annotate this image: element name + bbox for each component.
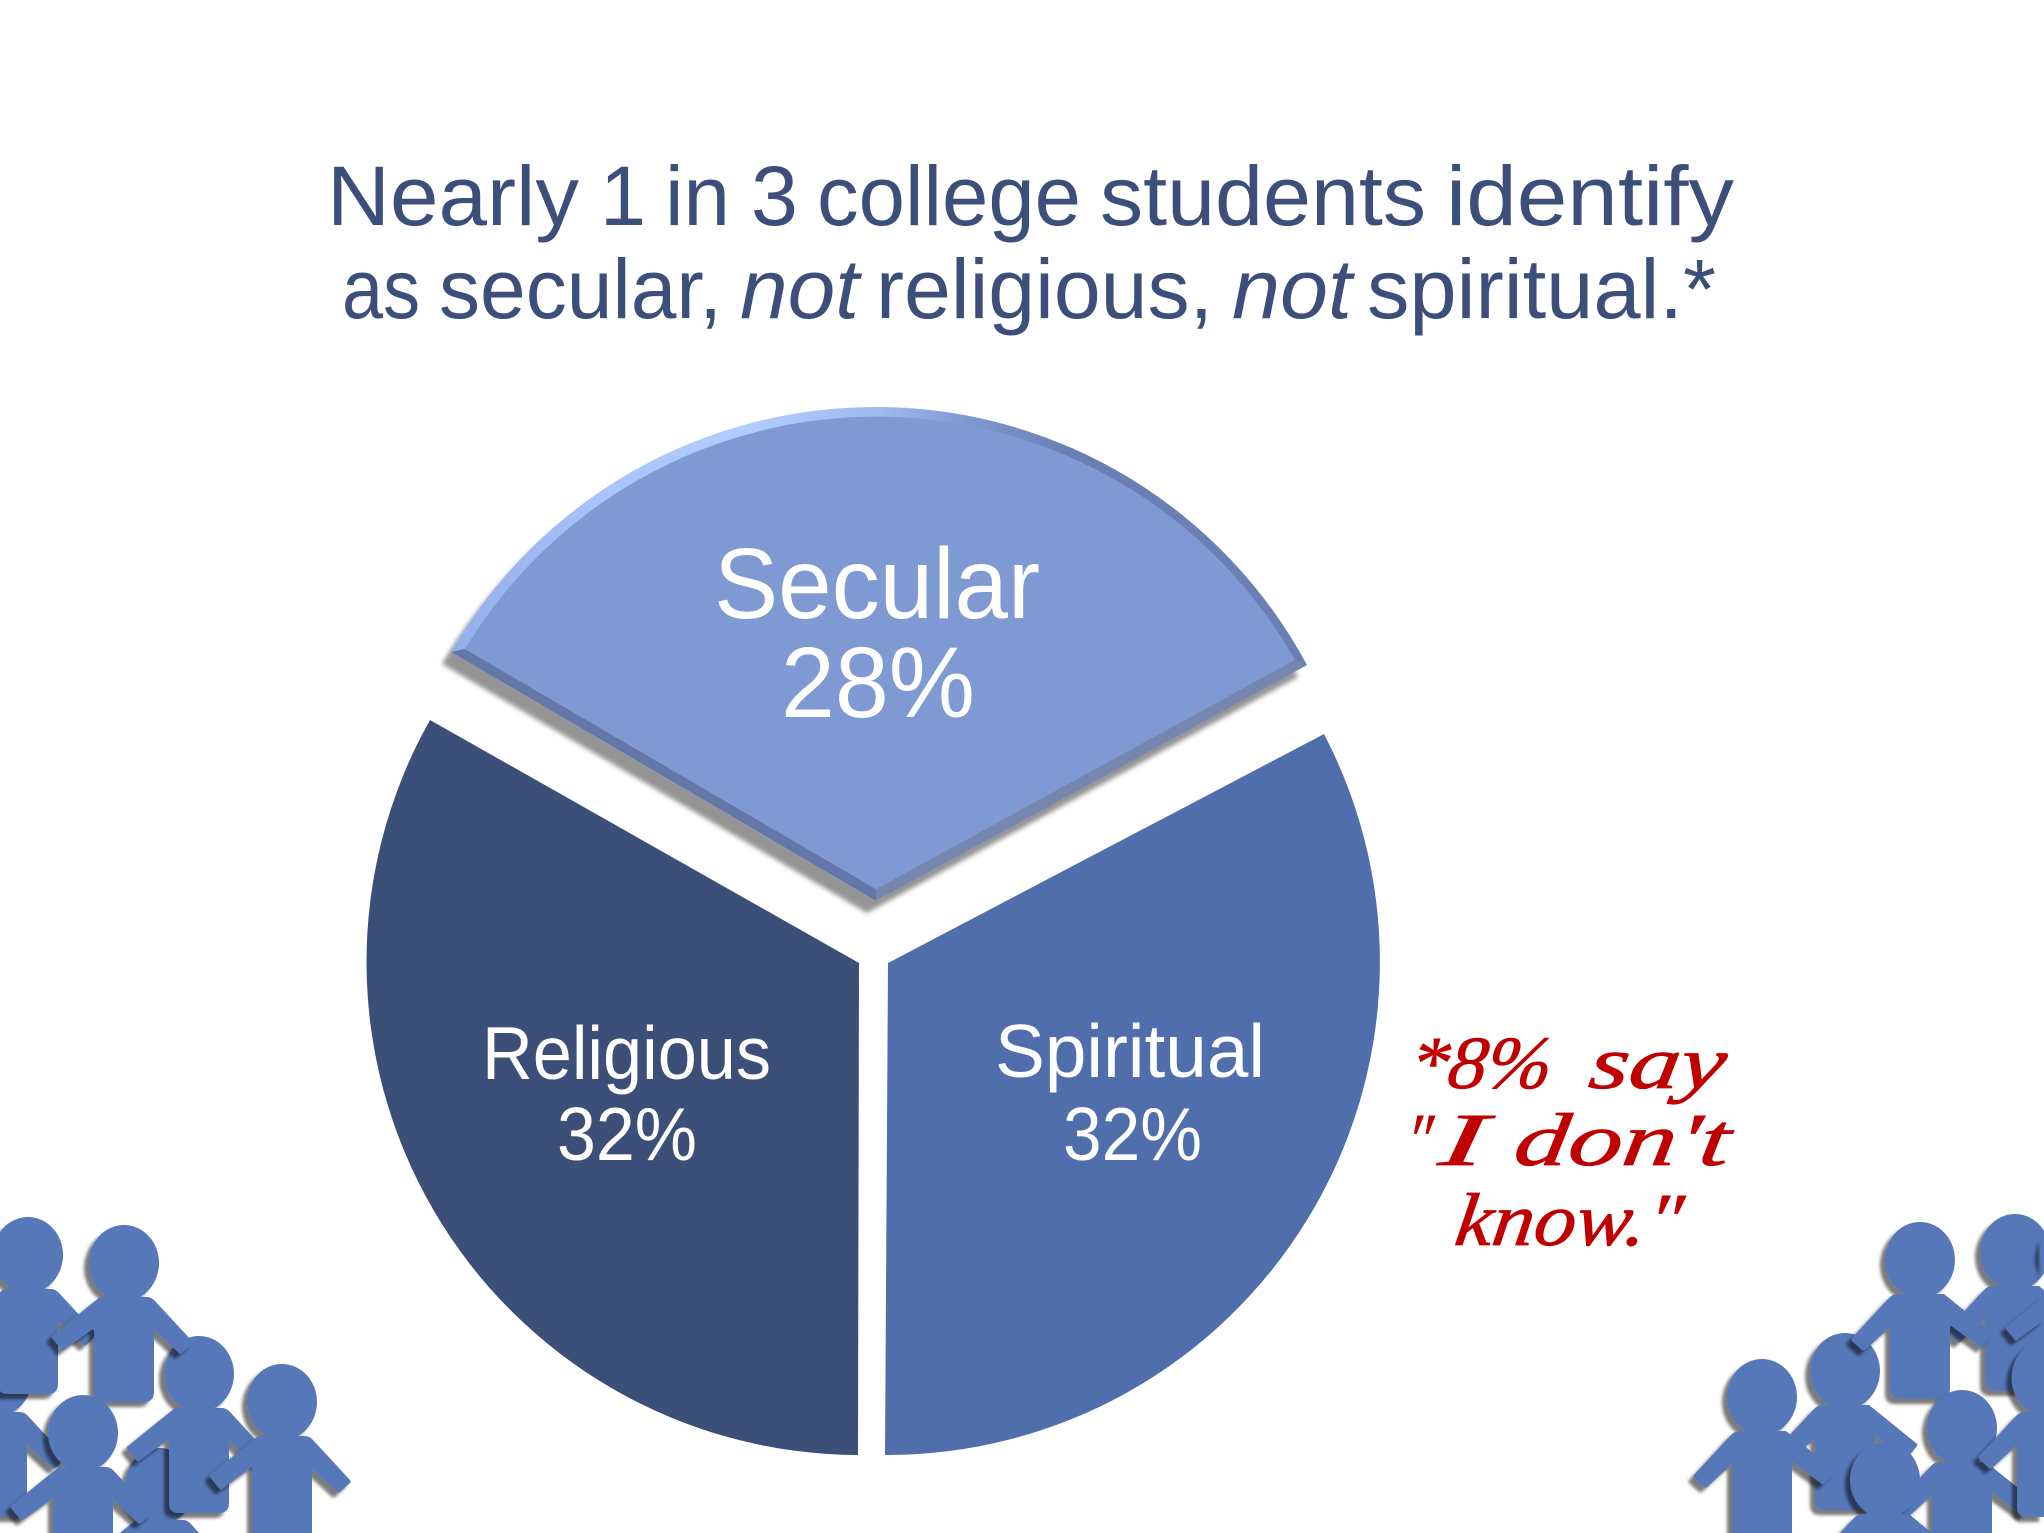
slice: religious (367, 720, 859, 1455)
handwritten note: *8% (1405, 1022, 1558, 1105)
title line 1: 1 (600, 149, 646, 243)
title line 1: identify (1446, 149, 1734, 243)
slice: secular, pulled out: Secular (714, 528, 1040, 640)
title line 1: college (817, 149, 1081, 243)
title line 2: as (342, 242, 420, 336)
slice: religious: 32% (557, 1092, 697, 1176)
title (327, 149, 1734, 336)
handwritten note (1400, 1022, 1739, 1262)
icon group: people bottom left (0, 1217, 351, 1533)
handwritten note: say (1585, 1022, 1733, 1105)
title line 2: religious, (876, 242, 1213, 336)
slice: spiritual (885, 734, 1380, 1455)
handwritten note: know." (1451, 1179, 1689, 1262)
slice: religious: Religious (482, 1011, 771, 1095)
slice: spiritual: Spiritual (995, 1009, 1265, 1093)
title line 2 (342, 242, 1716, 336)
title line 1: students (1100, 149, 1426, 243)
title line 2: spiritual.* (1367, 242, 1716, 336)
slice: secular, pulled out (451, 407, 1307, 901)
icon group: people bottom right (1694, 1214, 2044, 1533)
title line 1 (327, 149, 1734, 243)
title line 2: secular, (439, 242, 722, 336)
title line 2: not (1232, 242, 1356, 336)
slice: secular, pulled out: 28% (781, 627, 975, 739)
title line 1: 3 (751, 149, 798, 243)
title line 1: Nearly (327, 149, 579, 243)
handwritten note: don't (1510, 1099, 1739, 1182)
pie chart (367, 407, 1380, 1455)
slice: spiritual: 32% (1063, 1092, 1202, 1176)
title line 2: not (740, 242, 863, 336)
title line 1: in (665, 149, 730, 243)
handwritten note: " (1400, 1099, 1438, 1182)
handwritten note: I (1433, 1099, 1499, 1182)
